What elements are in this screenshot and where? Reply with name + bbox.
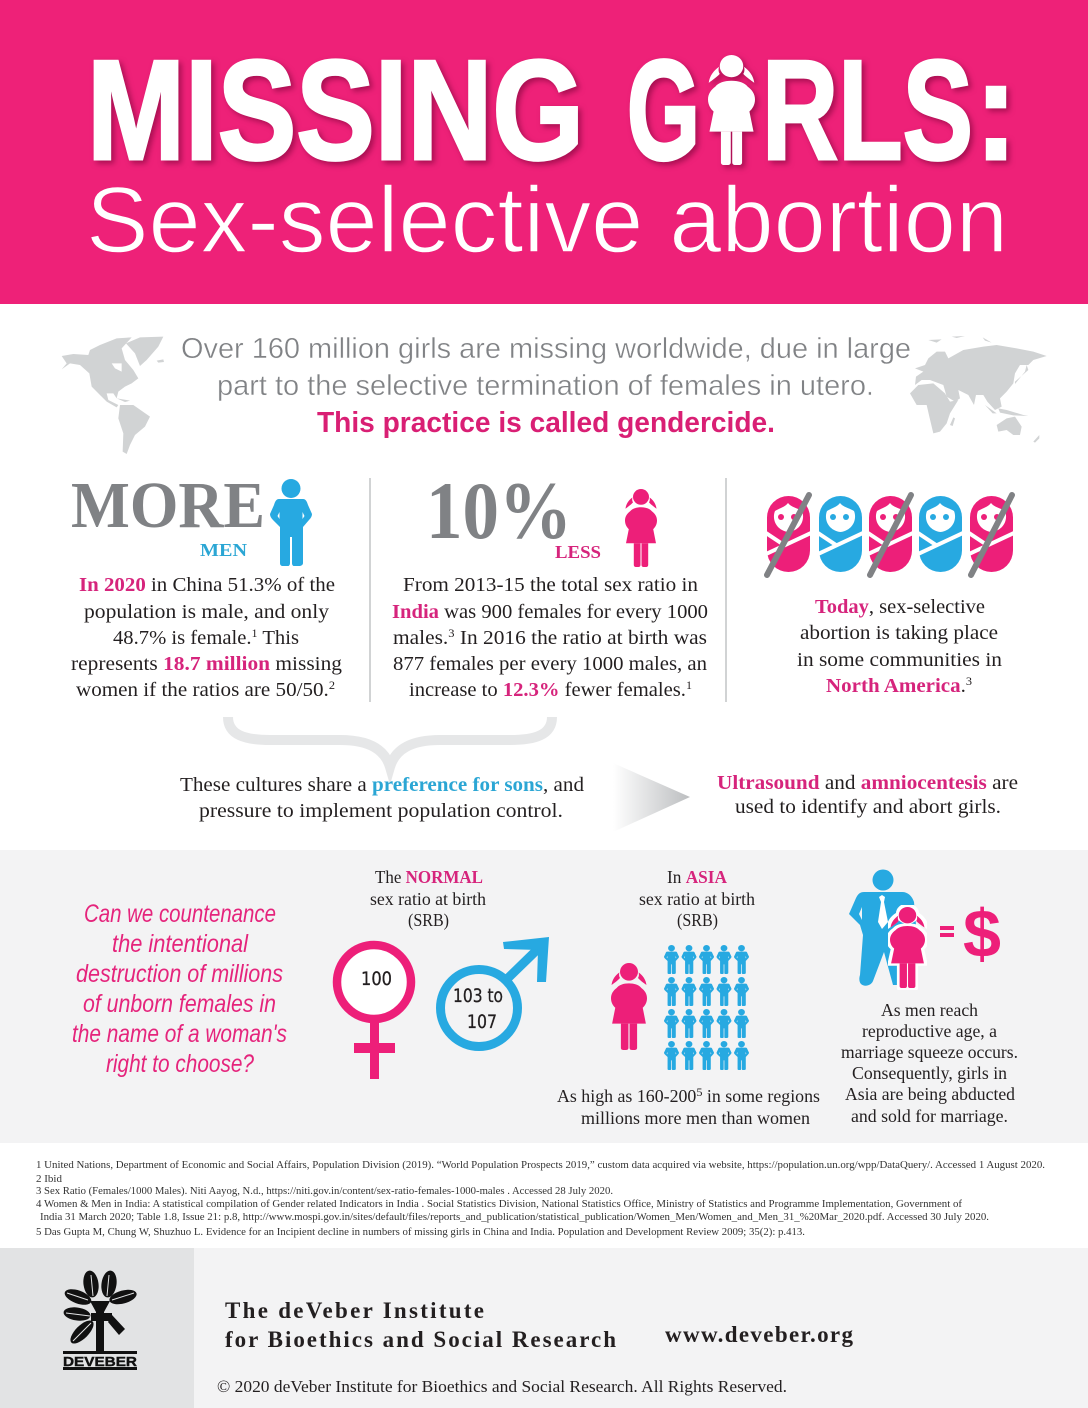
text block: marriage squeeze: As men reach [881,1000,978,1020]
footnotes [36,1160,1045,1238]
text block: marriage squeeze [841,1000,1018,1126]
title: Missing Girls: G [627,31,700,190]
icon: male symbol 103 to 107: 107 [467,1011,497,1033]
text block: preference for sons: These cultures share a preference for sons, and [180,774,584,796]
title: Missing Girls [87,31,1017,190]
heading: normal SRB: sex ratio at birth [370,889,486,909]
quote [72,900,287,1078]
text block: India: In 2016 the ratio at birth was [455,627,707,649]
intro text: Over 160 million girls are missing worldwide, due in large [181,333,911,365]
text block: preference for sons: pressure to implement population control. [199,800,563,822]
icon: equals dollar [940,896,1001,972]
quote: destruction of millions [76,960,283,988]
text block: China: 48.7% is female. [113,627,251,649]
text block: ultrasound [717,772,1018,818]
quote: of unborn females in [83,990,276,1018]
panel: North America [766,495,1014,697]
quote: Can we countenance [84,900,276,928]
text block: marriage squeeze: and sold for marriage. [851,1106,1008,1126]
text block: as high as: millions more men than women [581,1108,810,1128]
icon: female symbol 100: 100 [361,968,392,990]
text block: marriage squeeze: Consequently, girls in [852,1063,1007,1083]
text block: as high as: in some regions [702,1086,820,1106]
heading: Asia SRB [639,867,755,930]
text block: India: From 2013-15 the total sex ratio in [403,574,698,596]
text block: North America: abortion is taking place [800,622,998,644]
text block: India: 3 [448,626,455,640]
heading: normal SRB: The NORMAL [375,867,483,887]
text block: China [71,574,342,701]
title: Missing Girls: MISSING [87,31,584,190]
text block: marriage squeeze: reproductive age, a [862,1021,997,1041]
intro text [181,333,911,439]
text block: preference for sons [180,774,584,822]
text block: as high as: As high as 160-200 [557,1086,694,1106]
icon: equals dollar: $ [963,896,1001,972]
organisation name: for Bioethics and Social Research [225,1327,616,1352]
text block: as high as: 5 [696,1085,702,1099]
icon: male symbol 103 to 107: 103 to [453,985,503,1007]
intro text: part to the selective termination of females in utero. [217,370,874,402]
text block: India: 1 [686,678,692,692]
text block: ultrasound: Ultrasound and amniocentesis are [717,772,1018,794]
footnotes: 5 Das Gupta M, Chung W, Shuzhuo L. Evidence for an Incipient decline in numbers of missing girls in China and India. Population and Development Review 2009; 35(2): p.413. [36,1227,805,1238]
brace [228,717,552,767]
subtitle: Sex-selective abortion [86,167,1008,272]
quote: right to choose? [106,1050,254,1078]
label: LESS: LESS [555,542,601,562]
footnotes: 4 Women & Men in India: A statistical compilation of Gender related Indicators in India . Social Statistics Division, National Statistics Office, Ministry of Statistics and Programme Implementation, Government of [36,1199,963,1210]
icon row: crossed-out babies [766,495,1014,575]
icon: male symbol 103 to 107 [440,937,549,1046]
text block: North America [797,596,1002,697]
logo: deVeber tree [63,1270,138,1370]
label: MEN: MEN [200,540,247,560]
footnotes: 3 Sex Ratio (Females/1000 Males). Niti Aayog, N.d., https://niti.gov.in/content/sex-ratio-females-1000-males . Accessed 28 July 2020. [36,1186,613,1197]
icon: world map right [910,336,1047,443]
panel: China more men [71,469,342,701]
icon grid: men [664,945,749,1070]
text block: North America: North America. [826,675,966,697]
text block: North America: in some communities in [797,649,1002,671]
heading: 10%: 10% [426,465,572,556]
heading: Asia SRB: (SRB) [677,910,718,930]
footer [0,1248,1088,1408]
heading: MORE: MORE [71,469,265,542]
icon: man [270,479,312,566]
footnotes: India 31 March 2020; Table 1.8, Issue 21: p.8, http://www.mospi.gov.in/sites/default/files/reports_and_publication/statistical_publication/Women_Men/Women_and_Men_31_%20Mar_2020.pdf. Accessed 30 July 2020. [40,1212,989,1223]
text block: ultrasound: used to identify and abort girls. [735,796,1001,818]
text block: China: In 2020 in China 51.3% of the [79,574,335,596]
panel: India fewer women [392,465,708,701]
text block: as high as [557,1085,820,1128]
text block: marriage squeeze: marriage squeeze occurs. [841,1042,1018,1062]
text block: India: males. [393,627,446,649]
panel: grey band [0,850,1088,1143]
text block: marriage squeeze: Asia are being abducted [845,1084,1015,1104]
heading: normal SRB [370,867,486,930]
organisation name [225,1298,616,1352]
text block: China: 2 [329,678,335,692]
icon: man and girl [849,870,927,990]
text block: China: represents 18.7 million missing [71,653,342,675]
heading: Asia SRB: In ASIA [667,867,727,887]
text block: China: This [258,627,299,649]
footnotes: 2 Ibid [36,1174,63,1185]
quote: the name of a woman's [72,1020,287,1048]
text block: China: population is male, and only [84,601,330,623]
text block: India: India was 900 females for every 1000 [392,601,708,623]
quote: the intentional [112,930,249,958]
text block: North America: Today, sex-selective [815,596,985,618]
heading: normal SRB: (SRB) [408,910,449,930]
text block: China: 1 [252,626,258,640]
icon: female symbol 100 [337,945,411,1079]
text block: India: increase to 12.3% fewer females. [409,679,685,701]
arrow [613,763,690,832]
header banner [0,0,1088,304]
text block: India: 877 females per every 1000 males, an [393,653,707,675]
logo: deVeber tree: DEVEBER [63,1354,138,1369]
website: www.deveber.org [665,1322,854,1347]
footnotes: 1 United Nations, Department of Economic and Social Affairs, Population Division (2019). “World Population Prospects 2019,” custom data acquired via website, https://population.un.org/wpp/DataQuery/. Accessed 1 August 2020. [36,1160,1045,1171]
text block: North America: 3 [966,674,972,688]
title: Missing Girls: : [975,31,1017,190]
text block: India [392,574,708,701]
title: Missing Girls: RLS [762,31,973,190]
callout: gendercide: This practice is called gendercide. [317,407,775,439]
icon: girl Asia [611,963,647,1050]
text block: China: women if the ratios are 50/50. [76,679,322,701]
organisation name: The deVeber Institute [225,1298,484,1323]
copyright: © 2020 deVeber Institute for Bioethics and Social Research. All Rights Reserved. [217,1377,787,1396]
icon: girl [625,489,657,567]
icon: world map left [62,337,164,454]
heading: Asia SRB: sex ratio at birth [639,889,755,909]
